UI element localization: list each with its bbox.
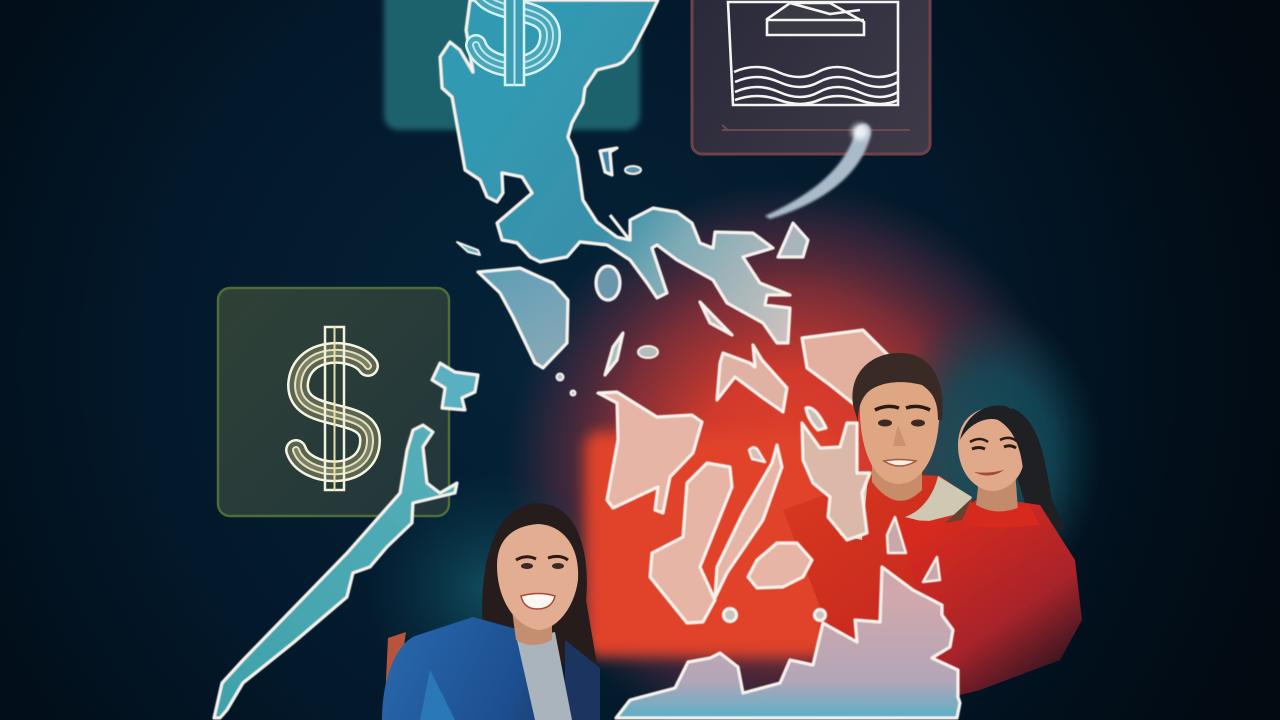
panel: top teal card [384, 0, 640, 130]
island: Negros [598, 392, 702, 513]
map: Philippines [214, 0, 960, 718]
island: Bohol [748, 543, 812, 588]
icon: top dollar sign [476, 0, 550, 85]
island: Panay [717, 345, 787, 412]
person: woman in red [897, 406, 1082, 700]
island: Siargao [923, 557, 940, 582]
glow: red haze [505, 180, 1075, 720]
island: small oval [625, 166, 641, 174]
island: Marinduque [596, 266, 620, 300]
island: Camiguin [814, 610, 826, 620]
arrow: white comet swoosh [765, 124, 871, 219]
island: Mindoro [478, 268, 568, 368]
island: Tablas [605, 333, 623, 375]
island: Biliran [806, 408, 826, 430]
island: Samar [802, 330, 888, 405]
island: Busuanga [432, 363, 478, 410]
island: Luzon and Bicol [440, 0, 790, 343]
icon: ballot box [728, 2, 898, 105]
glow: teal haze behind people [878, 305, 1102, 605]
island: Romblon [638, 346, 658, 358]
island: Cebu strip [715, 445, 782, 598]
island: Masbate [700, 302, 732, 335]
island: Palawan [214, 425, 457, 718]
island: Camotes [749, 447, 765, 462]
island: Cebu [650, 463, 732, 623]
island: Lubang [457, 242, 480, 255]
island: Leyte [802, 423, 870, 540]
island: Catanduanes [778, 223, 808, 257]
person: man body [783, 472, 972, 650]
person: man head [852, 353, 943, 501]
glow: teal haze behind woman [365, 470, 615, 710]
icon: left dollar sign [296, 327, 370, 490]
island: Polillo [600, 148, 617, 175]
person: woman in blue blazer [382, 503, 600, 720]
panel: top right ballot card [692, 0, 930, 154]
panel: left dollar card [218, 288, 449, 516]
island: dot a [556, 374, 564, 380]
island: Siquijor [724, 608, 736, 622]
island: Dinagat [887, 517, 906, 553]
island: Mindanao [616, 567, 960, 718]
panel: red glowing square [585, 432, 829, 657]
island: dot b [570, 390, 576, 396]
island: sliver [610, 215, 628, 238]
